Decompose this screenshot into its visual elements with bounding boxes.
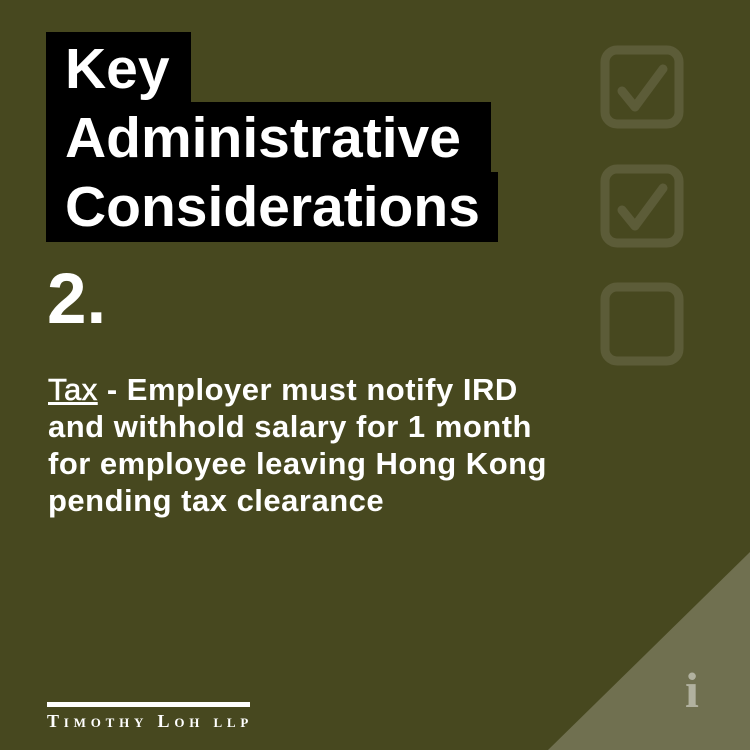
body text: pending tax clearance: [48, 483, 384, 518]
title: Considerations: [65, 175, 480, 239]
title: [46, 32, 498, 242]
body text: Tax - Employer must notify IRD: [48, 372, 518, 407]
info triangle: i: [685, 662, 699, 718]
body text: [48, 372, 547, 518]
icon: checklist: [600, 46, 684, 366]
title: Key: [65, 37, 170, 101]
logo: Timothy Loh llp: [47, 711, 253, 731]
title: Administrative: [65, 106, 461, 170]
body text: and withhold salary for 1 month: [48, 409, 532, 444]
number: 2.: [47, 260, 106, 339]
logo: [47, 702, 253, 731]
body text: for employee leaving Hong Kong: [48, 446, 547, 481]
